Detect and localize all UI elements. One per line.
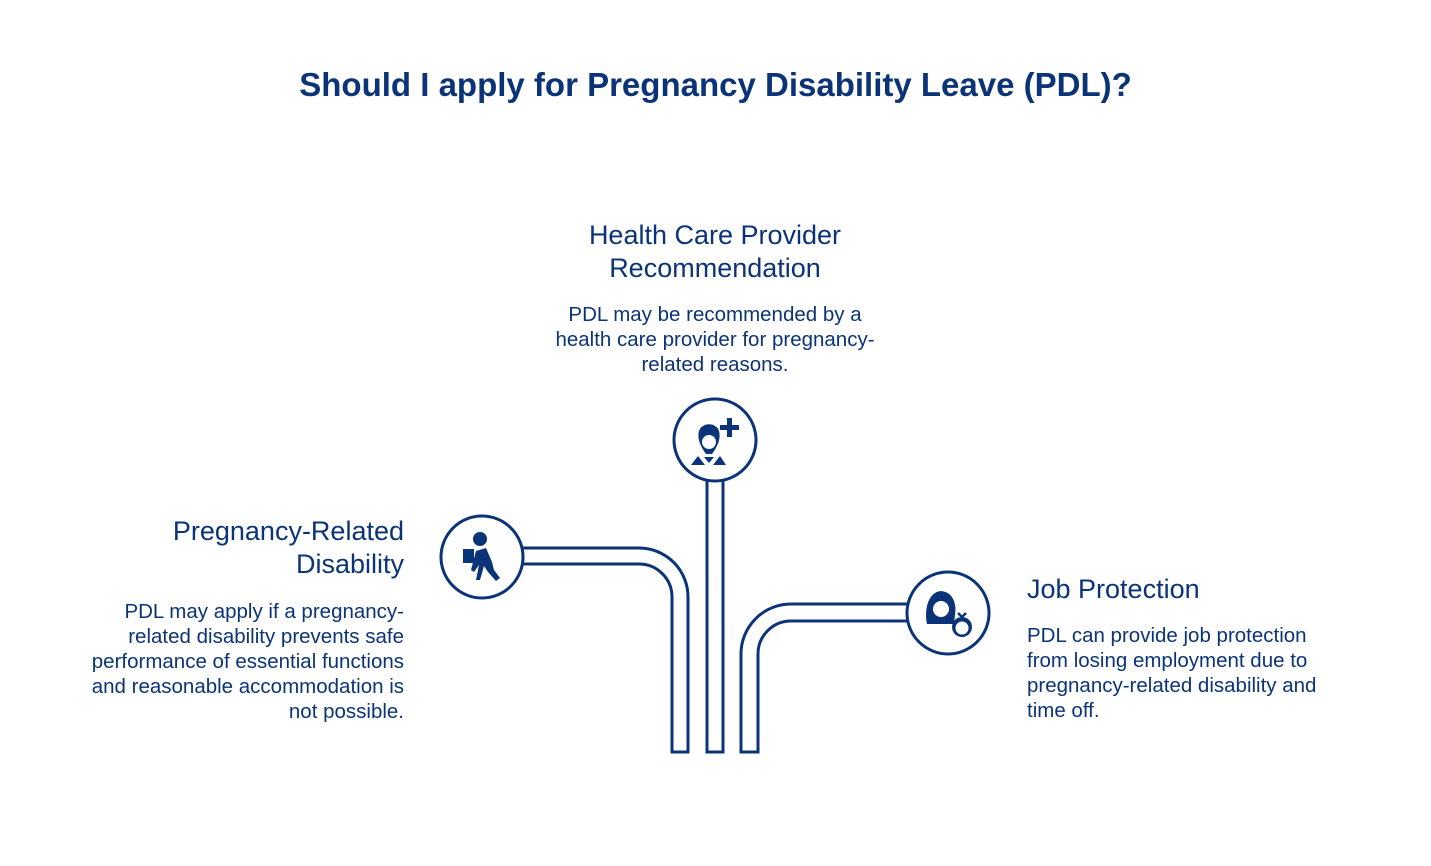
icon: disability person — [441, 516, 523, 598]
text: job protection: time off. — [1027, 699, 1100, 722]
text: health care provider: Recommendation — [609, 253, 821, 283]
text: health care provider: PDL may be recommended by a — [568, 303, 862, 326]
text: pregnancy-related disability: PDL may apply if a pregnancy- — [124, 600, 404, 623]
title: Should I apply for Pregnancy Disability Leave (PDL)? — [299, 66, 1132, 103]
text: health care provider — [555, 220, 875, 376]
text: health care provider: related reasons. — [641, 353, 788, 376]
text: health care provider: Health Care Provider — [589, 220, 841, 250]
text: pregnancy-related disability — [92, 516, 404, 723]
text: job protection: PDL can provide job protection — [1027, 624, 1307, 647]
text: pregnancy-related disability: related disability prevents safe — [128, 625, 404, 648]
text: pregnancy-related disability: and reasonable accommodation is — [92, 675, 404, 698]
icon: mother and baby — [907, 572, 989, 654]
icon: health care provider — [674, 399, 756, 481]
text: pregnancy-related disability: Disability — [296, 549, 404, 579]
text: job protection: pregnancy-related disability and — [1027, 674, 1316, 697]
text: job protection: Job Protection — [1027, 574, 1200, 604]
text: pregnancy-related disability: performance of essential functions — [92, 650, 404, 673]
pipe: center — [707, 478, 723, 752]
pipe: right — [741, 604, 910, 752]
text: health care provider: health care provider for pregnancy- — [555, 328, 875, 351]
text: pregnancy-related disability: Pregnancy-Related — [173, 516, 404, 546]
text: job protection — [1027, 574, 1316, 722]
text: job protection: from losing employment due to — [1027, 649, 1307, 672]
pipe: left — [520, 548, 688, 752]
text: pregnancy-related disability: not possible. — [289, 700, 404, 723]
